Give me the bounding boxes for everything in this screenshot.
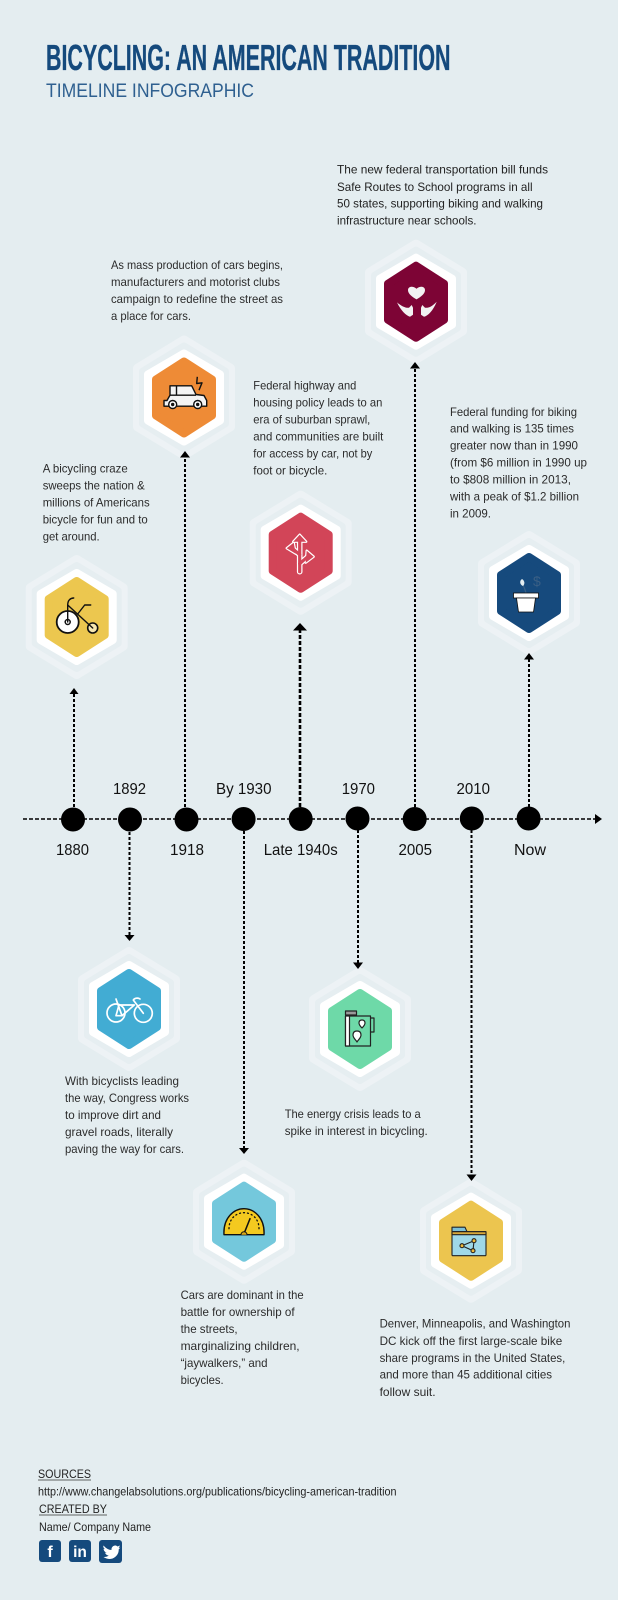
icon: facebook: f <box>47 1544 53 1561</box>
footer: created by <box>39 1503 151 1534</box>
hexagon badge: 1970 <box>314 972 406 1086</box>
text: 1892: With bicyclists leading <box>65 1074 179 1088</box>
arrow: 1918 up <box>180 451 190 807</box>
icon: fuel can <box>346 1011 374 1046</box>
text: by 1930: “jaywalkers,” and <box>181 1356 268 1370</box>
text: late 1940s: for access by car, not by <box>253 446 372 460</box>
text: by 1930: bicycles. <box>181 1373 224 1387</box>
hexagon badge: 2005 <box>370 245 462 359</box>
panel: 2005 <box>337 164 548 359</box>
text: 1918: campaign to redefine the street as <box>111 292 283 306</box>
year labels: 1970 <box>342 781 375 798</box>
icon: car <box>164 377 207 408</box>
footer: sources: http://www.changelabsolutions.org/publications/bicycling-american-tradition <box>38 1486 396 1499</box>
text: late 1940s: housing policy leads to an <box>253 396 382 410</box>
year labels: 1880 <box>56 842 89 859</box>
text: now: with a peak of $1.2 billion <box>449 490 579 504</box>
text: by 1930 <box>181 1288 304 1387</box>
arrow: now up <box>524 653 534 807</box>
hexagon badge: 2010 <box>425 1184 517 1298</box>
icon: facebook <box>39 1540 61 1562</box>
icon: twitter <box>99 1540 122 1563</box>
text: 2010: DC kick off the first large-scale bike <box>380 1334 563 1348</box>
panel: 2010 <box>380 1184 570 1399</box>
year labels: Late 1940s <box>264 842 338 859</box>
footer: sources <box>38 1468 396 1499</box>
text: 2010 <box>380 1316 570 1399</box>
text: 2005: The new federal transportation bill funds <box>337 164 548 176</box>
text: 1892 <box>65 1074 189 1156</box>
text: 1880: bicycle for fun and to <box>43 512 148 526</box>
panel: 1892 <box>65 952 189 1156</box>
text: 1970 <box>285 1107 428 1138</box>
text: 1970: The energy crisis leads to a <box>285 1107 421 1121</box>
text: 2010: share programs in the United States, <box>380 1351 565 1365</box>
arrow: 2005 up <box>410 362 420 807</box>
year labels: 2005 <box>398 842 432 859</box>
text: by 1930: marginalizing children, <box>181 1339 300 1353</box>
arrow: 1892 down <box>124 832 134 941</box>
text: late 1940s: and communities are built <box>253 429 384 443</box>
icon: speedometer <box>224 1209 264 1235</box>
hexagon badge: 1880 <box>31 560 123 674</box>
year labels: 1918 <box>170 842 204 859</box>
icon: linkedin: in <box>73 1544 87 1561</box>
panel: 1970 <box>285 972 428 1138</box>
text: late 1940s: era of suburban sprawl, <box>253 412 370 426</box>
text: 1880: get around. <box>43 529 100 543</box>
text: now: Federal funding for biking <box>450 405 577 419</box>
icon: penny-farthing <box>57 598 98 633</box>
panel: now <box>449 405 587 650</box>
text: by 1930: the streets, <box>181 1322 238 1336</box>
panel: by 1930 <box>181 1165 304 1387</box>
icon: folder share <box>452 1227 486 1256</box>
text: 1970: spike in interest in bicycling. <box>285 1124 428 1138</box>
year labels: 1892 <box>113 781 146 798</box>
arrow: late 1940s up <box>293 623 307 807</box>
panel: 1880 <box>31 461 150 674</box>
text: 2010: and more than 45 additional cities <box>380 1368 552 1382</box>
hexagon badge: by 1930 <box>198 1165 290 1279</box>
text: now: (from $6 million in 1990 up <box>450 456 587 470</box>
text: late 1940s: Federal highway and <box>253 378 356 392</box>
hexagon badge: 1918 <box>138 340 230 454</box>
text: by 1930: Cars are dominant in the <box>181 1288 304 1302</box>
icon: diverging arrows <box>287 535 314 572</box>
icon: bicycle <box>107 998 152 1022</box>
text: 1918: a place for cars. <box>111 309 191 323</box>
arrow: 2010 down <box>466 830 476 1181</box>
panel: late 1940s <box>253 378 384 610</box>
text: 1918 <box>111 258 283 323</box>
text: now: to $808 million in 2013, <box>450 473 571 487</box>
text: late 1940s: foot or bicycle. <box>253 463 327 477</box>
text: 1892: to improve dirt and <box>65 1108 161 1122</box>
text: 2005: infrastructure near schools. <box>337 214 476 228</box>
text: late 1940s <box>253 378 384 477</box>
text: 1892: paving the way for cars. <box>65 1142 184 1156</box>
text: 1918: As mass production of cars begins, <box>111 258 283 272</box>
icon: hands holding heart <box>397 287 437 317</box>
year labels: Now <box>514 842 546 859</box>
text: 2005: Safe Routes to School programs in all <box>337 181 533 194</box>
hexagon badge: now <box>483 536 575 650</box>
text: now: and walking is 135 times <box>450 422 574 436</box>
icon: money plant: $ <box>533 573 541 589</box>
arrow: 1880 up <box>70 688 78 807</box>
hexagon badge: late 1940s <box>255 496 347 610</box>
text: now <box>449 405 587 521</box>
timeline axis <box>23 806 602 832</box>
hexagon badge: 1892 <box>83 952 175 1066</box>
year labels: 2010 <box>456 781 490 798</box>
arrow: by 1930 down <box>239 831 249 1154</box>
text: 1918: manufacturers and motorist clubs <box>111 275 280 289</box>
footer: sources: SOURCES <box>38 1468 91 1481</box>
text: by 1930: battle for ownership of <box>181 1305 295 1319</box>
text: 1880: millions of Americans <box>43 495 150 509</box>
year labels: By 1930 <box>216 781 272 798</box>
footer: created by: CREATED BY <box>39 1503 107 1516</box>
arrow: 1970 down <box>353 830 363 969</box>
text: 1892: the way, Congress works <box>65 1091 189 1105</box>
text: now: greater now than in 1990 <box>450 439 578 453</box>
text: 1892: gravel roads, literally <box>65 1125 173 1139</box>
text: 2010: Denver, Minneapolis, and Washington <box>380 1316 570 1330</box>
text: 1880: sweeps the nation & <box>43 478 145 492</box>
text: 2010: follow suit. <box>380 1385 436 1399</box>
year labels <box>56 781 546 859</box>
footer: created by: Name/ Company Name <box>39 1521 151 1534</box>
text: now: in 2009. <box>450 507 491 521</box>
text: 2005 <box>337 164 548 228</box>
text: 2005: 50 states, supporting biking and walking <box>337 198 543 210</box>
text: 1880 <box>43 461 150 543</box>
panel: 1918 <box>111 258 283 454</box>
subtitle: TIMELINE INFOGRAPHIC <box>46 80 254 102</box>
icon: linkedin <box>69 1540 91 1562</box>
text: 1880: A bicycling craze <box>43 461 128 475</box>
